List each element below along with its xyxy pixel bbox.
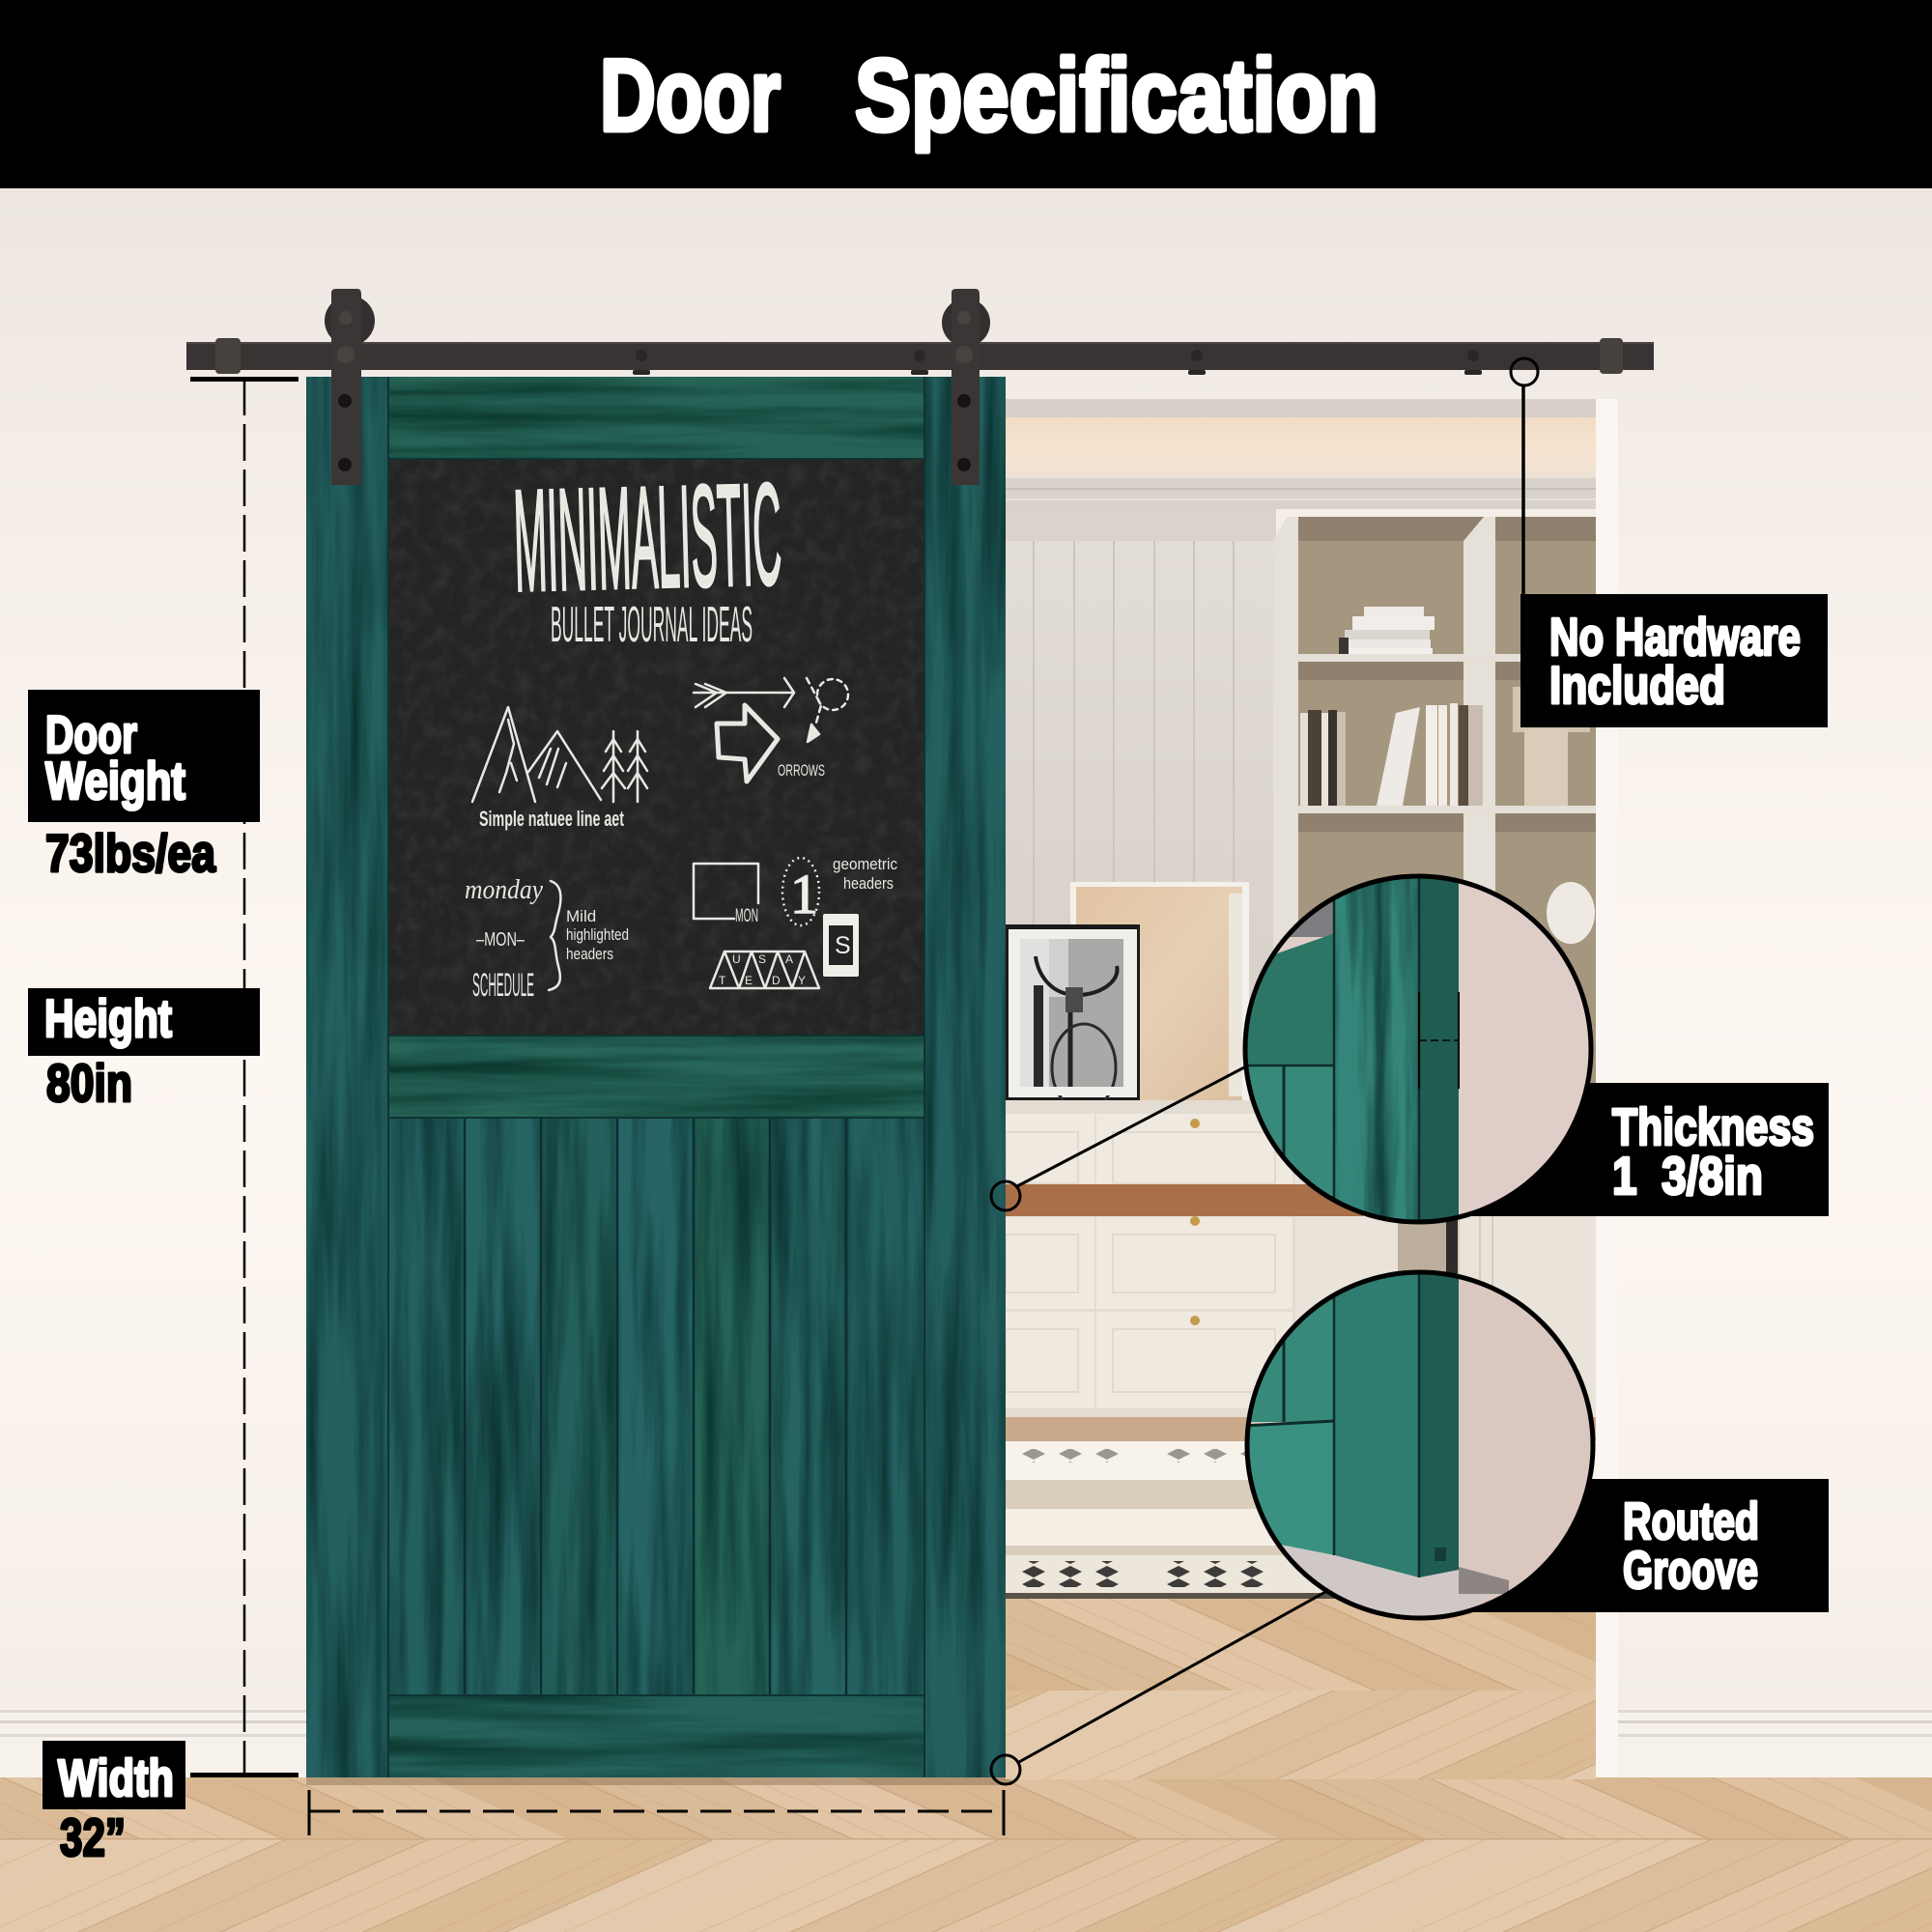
chalk box header: [694, 864, 758, 926]
sliding barn door rail: [186, 338, 1654, 375]
callout: door weight: Weight: [45, 751, 185, 810]
callout: door weight: [28, 690, 260, 822]
value: height: 80in: [46, 1053, 132, 1113]
chalk mountains and trees: [472, 707, 647, 802]
chalk caption: highlighted headers: [566, 907, 629, 963]
baseboard left: [0, 1708, 309, 1779]
barn door: MINIMALISTIC: [512, 452, 783, 622]
leader: routed groove: [991, 1592, 1325, 1784]
ceiling light strip: [1006, 417, 1596, 478]
callout: height: [28, 988, 260, 1056]
callout: height: Height: [44, 988, 172, 1048]
chalk pennants: S: [758, 952, 766, 966]
chalk box header: MON: [735, 906, 758, 926]
chalk caption: nature: Simple natuee line aet: [479, 807, 624, 831]
vertical planks: [388, 1118, 924, 1695]
wood countertop: [1006, 1184, 1363, 1216]
room seen through the opening: [1006, 399, 1618, 1779]
callout: width: Width: [58, 1749, 174, 1807]
chalk pennants: T: [719, 974, 726, 987]
chalk letter box: [823, 914, 859, 977]
chalk pennants: U: [732, 952, 741, 966]
left roller hanger: [325, 289, 375, 485]
barn door: [306, 377, 1006, 1777]
chalk pennants: A: [785, 952, 793, 966]
chalk caption: highlighted headers: headers: [566, 945, 613, 963]
text: routed groove: Routed: [1623, 1492, 1759, 1550]
chalkboard panel: [389, 452, 924, 1036]
leader: thickness: [991, 1067, 1244, 1210]
floor: [0, 1777, 1932, 1932]
stacked books: [1339, 607, 1435, 654]
value: width: 32”: [60, 1807, 126, 1867]
chalk caption: highlighted headers: Mild: [566, 907, 596, 925]
right roller hanger: [942, 289, 990, 485]
upright books: [1300, 703, 1483, 806]
chalk caption: geometric headers: geometric: [833, 855, 897, 873]
text: routed groove: [1623, 1492, 1759, 1600]
text: routed groove: Groove: [1623, 1540, 1758, 1600]
crown moulding: [1006, 478, 1596, 509]
left stop clamp: [215, 338, 241, 374]
text: thickness: [1612, 1098, 1814, 1206]
title: Door: [600, 39, 781, 153]
chalk pennants: Y: [798, 974, 806, 987]
vase: [1547, 882, 1595, 944]
detail circle: thickness: [1241, 869, 1599, 1231]
chalk number one: 1: [790, 863, 818, 925]
callout box: thickness: [1459, 1083, 1829, 1216]
door casing: [1006, 399, 1618, 1777]
bottom rail: [388, 1696, 924, 1777]
baseboard right: [1618, 1708, 1932, 1779]
chalk pennants: E: [745, 974, 753, 987]
chalk caption: geometric headers: [833, 855, 897, 893]
mid rail: [388, 1036, 924, 1118]
callout box: routed groove: [1459, 1479, 1829, 1612]
room floor strip: [1006, 1417, 1596, 1442]
chalk brace: [549, 881, 560, 990]
chalkboard panel: BULLET JOURNAL IDEAS: [551, 597, 753, 653]
detail circle: routed groove: [1241, 1265, 1599, 1623]
left stile: [306, 377, 388, 1777]
sculpture: [1513, 687, 1590, 806]
right stile: [924, 377, 1006, 1777]
chalk monday: monday: [465, 874, 543, 905]
callout: no hardware: No Hardware: [1549, 607, 1801, 667]
bicycle framed photo: [1006, 924, 1140, 1111]
callout: door weight: Door: [45, 704, 137, 764]
value: door weight: 73lbs/ea: [45, 823, 215, 883]
room herringbone floor: [1006, 1599, 1596, 1779]
height dimension line: [190, 377, 298, 1777]
callout: width: [43, 1741, 185, 1809]
chalk mon: –MON–: [476, 929, 526, 951]
rail bolts: [633, 350, 1482, 375]
bookcase: [1273, 517, 1596, 1135]
cabinets: [1006, 1100, 1295, 1419]
title bar: [0, 0, 1932, 188]
panelled wall: [1006, 509, 1276, 1121]
width dimension line: [309, 1790, 1004, 1835]
chalk letter box: S: [835, 932, 851, 959]
callout: no hardware: Included: [1549, 655, 1725, 715]
chalk caption: arrows: ORROWS: [778, 761, 825, 780]
right stop clamp: [1600, 338, 1623, 374]
title: Specification: [855, 39, 1378, 153]
callout: no hardware: [1520, 594, 1828, 727]
title: [600, 39, 1378, 153]
chalk pennants: D: [772, 974, 781, 987]
chalk pennants: [710, 952, 819, 988]
chalk caption: geometric headers: headers: [843, 874, 894, 893]
chalk arrows: [694, 678, 848, 781]
rug: [1006, 1441, 1596, 1601]
chalk caption: highlighted headers: highlighted: [566, 925, 629, 944]
chalkboard panel: SCHEDULE: [472, 967, 534, 1004]
text: thickness: Thickness: [1612, 1098, 1814, 1156]
text: thickness: 1 3/8in: [1612, 1146, 1763, 1206]
rear lower wall: [1294, 1100, 1596, 1419]
top rail: [388, 377, 924, 459]
tan framed print: [1070, 882, 1249, 1102]
leader: hardware: [1511, 358, 1538, 594]
